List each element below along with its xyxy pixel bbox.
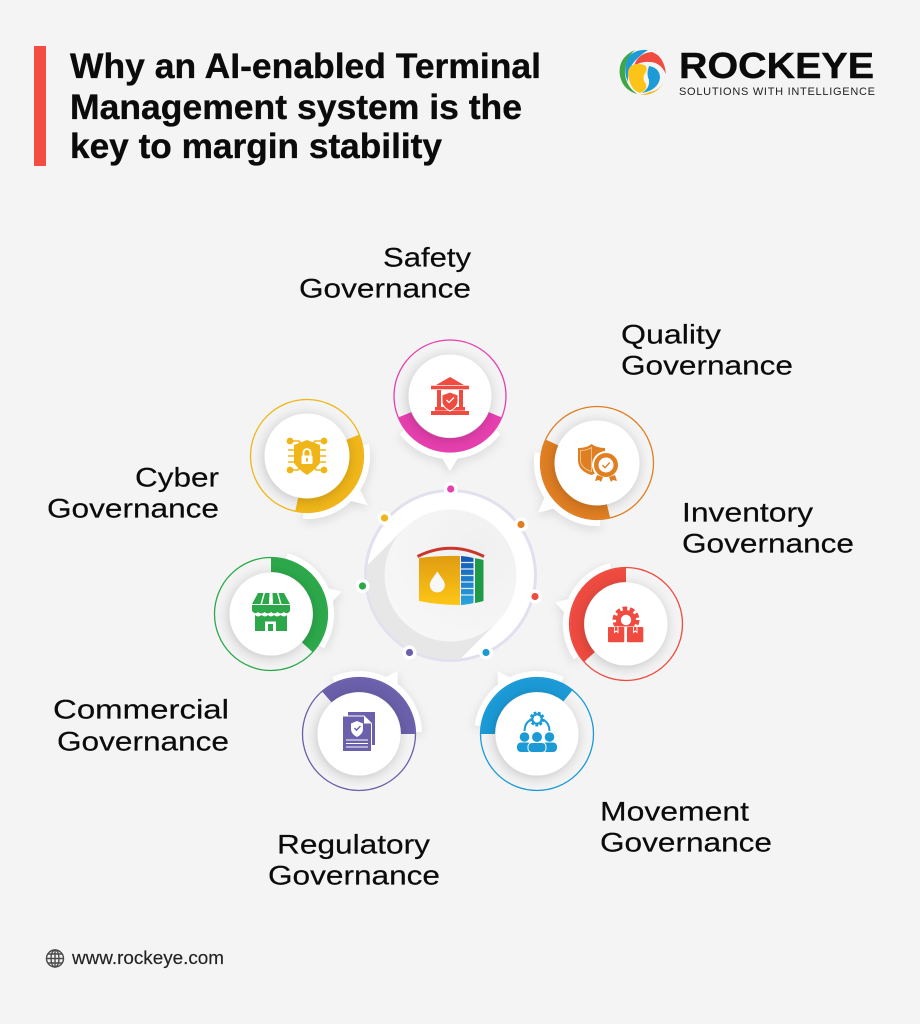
label: Movement Governance: Movement — [600, 796, 750, 826]
label: Regulatory Governance: Regulatory — [277, 830, 431, 860]
label: Cyber Governance — [47, 462, 219, 524]
white disc — [318, 692, 400, 776]
node: Movement Governance — [479, 672, 594, 790]
ring outline — [214, 558, 328, 670]
icon: logo swirl — [620, 50, 666, 95]
white disc — [230, 572, 312, 656]
website url: www.rockeye.com — [71, 947, 224, 968]
label: Safety Governance: Safety — [383, 242, 472, 272]
white disc — [496, 692, 578, 776]
node: Cyber Governance — [250, 400, 367, 515]
icon: gear with boxes — [608, 609, 644, 642]
label: Movement Governance — [600, 796, 772, 858]
pointer bracket — [538, 453, 600, 522]
label: Inventory Governance: Governance — [682, 528, 854, 558]
progress band — [405, 415, 495, 445]
label: Cyber Governance: Cyber — [135, 462, 219, 492]
central hub — [356, 482, 542, 662]
pointer bracket — [556, 567, 611, 657]
node: Regulatory Governance — [302, 672, 418, 790]
icon: documents with shield — [342, 712, 375, 752]
node: Quality Governance — [538, 406, 654, 522]
label: Inventory Governance — [682, 498, 854, 558]
label: Commercial Governance — [53, 694, 229, 756]
white disc — [408, 354, 492, 438]
title — [70, 47, 541, 166]
label: Quality Governance: Quality — [621, 320, 722, 350]
node: Safety Governance — [394, 340, 506, 470]
label: Safety Governance: Governance — [299, 274, 471, 304]
hub inner disc — [384, 510, 516, 642]
pointer bracket — [403, 432, 497, 470]
white disc — [264, 414, 350, 498]
logo tagline: SOLUTIONS WITH INTELLIGENCE — [679, 86, 875, 98]
progress band — [327, 685, 408, 734]
title: Management system is the — [70, 88, 522, 127]
ring outline — [570, 568, 682, 680]
logo: Rockeye — [620, 45, 875, 98]
label: Inventory Governance: Inventory — [682, 498, 814, 528]
pointer bracket — [479, 672, 562, 726]
progress band — [488, 685, 568, 734]
icon: circuit shield with lock — [287, 438, 327, 475]
label: Cyber Governance: Governance — [47, 494, 219, 524]
label: Commercial Governance: Commercial — [53, 694, 229, 724]
title accent bar — [34, 46, 46, 166]
label: Regulatory Governance: Governance — [268, 860, 440, 890]
icon: shield and badge — [578, 444, 620, 482]
hub connector dots — [356, 482, 542, 660]
footer website — [46, 947, 224, 968]
label: Quality Governance: Governance — [621, 350, 793, 380]
icon: team with gear — [517, 714, 557, 752]
node: Inventory Governance — [556, 567, 682, 680]
icon: storefront — [252, 593, 290, 631]
hub disc — [366, 490, 536, 660]
ring outline — [540, 406, 654, 520]
label: Quality Governance — [621, 320, 793, 380]
progress band — [271, 565, 320, 647]
pointer bracket — [303, 445, 367, 515]
title: Why an AI-enabled Terminal — [70, 47, 541, 86]
label: Regulatory Governance — [268, 830, 440, 890]
label: Safety Governance — [299, 242, 472, 304]
hub long shadow — [367, 530, 496, 659]
label: Commercial Governance: Governance — [57, 726, 229, 756]
ring outline — [394, 340, 506, 452]
label: Movement Governance: Governance — [600, 828, 772, 858]
ring outline — [250, 400, 364, 512]
logo wordmark: ROCKEYE — [679, 45, 874, 86]
icon: storage tank with oil drop — [418, 548, 484, 605]
progress band — [548, 443, 608, 512]
progress band — [297, 437, 356, 505]
title: key to margin stability — [70, 127, 443, 166]
white disc — [554, 420, 640, 506]
icon: globe — [46, 950, 64, 967]
pointer bracket — [334, 672, 418, 732]
icon: bank with shield — [431, 377, 469, 415]
ring outline — [480, 678, 594, 790]
white disc — [584, 582, 668, 666]
pointer bracket — [286, 557, 340, 646]
node: Commercial Governance — [214, 557, 340, 670]
progress band — [577, 575, 626, 657]
ring outline — [302, 678, 416, 790]
